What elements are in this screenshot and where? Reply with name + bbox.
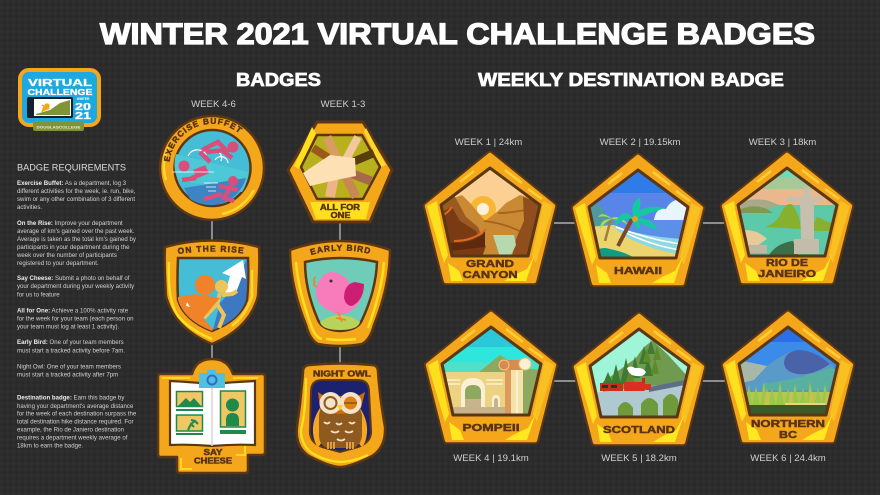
badge: night owl [297,364,385,467]
text block: badge requirements: swim or any other combination of 3 different [17,196,135,203]
text block: badge requirements: for the week for your team (each person on [17,316,134,322]
badge: on the rise [164,239,260,346]
badge: pompeii [428,314,554,440]
title: WINTER 2021 VIRTUAL CHALLENGE BADGES [100,18,815,51]
text block: badge requirements: Early Bird: One of your team members [17,339,124,346]
badge: hawaii: HAWAII [614,265,662,277]
badge: say cheese: SAY [204,448,223,457]
badge: all for one: ONE [330,211,351,220]
text block: badge requirements: week over the number of participants [16,252,117,259]
badge: exercise buffet [158,114,266,222]
label: week 4-6: WEEK 4-6 [191,99,236,110]
heading: badges: BADGES [236,70,321,90]
badge: night owl: NIGHT OWL [313,370,371,378]
badge: all for one [288,122,392,222]
label: week 5: WEEK 5 | 18.2km [601,453,677,464]
badge: rio de janeiro: RIO DE [766,258,808,269]
text block: badge requirements: must start a tracked activity after 7pm [17,372,118,378]
text block: badge requirements: Destination badge: Earn this badge by [17,394,125,402]
badge: say cheese [158,359,265,473]
badge: all for one: ALL FOR [320,203,360,212]
text block: badge requirements: must start a tracked activity before 7am. [17,348,125,354]
badge: rio de janeiro [724,155,850,281]
text block: badge requirements: your team must log at least 1 activity). [17,324,120,330]
badge: say cheese: CHEESE [194,456,232,466]
label: week 1-3: WEEK 1-3 [321,99,365,110]
badge: grand canyon: GRAND [466,258,515,270]
text block: badge requirements: participants in your department during the [17,244,130,251]
text block: badge requirements: different activities for the week, ie. run, bike, [17,188,136,195]
logo: virtual challenge: 20 [75,102,92,113]
badge: exercise buffet: EXERCISE BUFFET [164,118,243,162]
text block: badge requirements: Say Cheese: Submit a photo on behalf of [17,275,130,282]
logo: virtual challenge: 21 [75,111,92,122]
label: week 2: WEEK 2 | 19.15km [600,137,680,148]
logo: virtual challenge: CHALLENGE [28,87,93,97]
badge: early bird [288,240,392,348]
label: week 1: WEEK 1 | 24km [455,137,522,148]
text block: badge requirements: for the week of each destination surpass the [17,410,137,418]
badge: rio de janeiro: JANEIRO [758,269,816,280]
text block: badge requirements: total destination hike distance required. For [17,418,134,426]
text block: badge requirements: activities. [17,204,42,211]
icon: camera [199,370,225,388]
text block: badge requirements: requires a department weekly average of [17,434,128,442]
badge: early bird: EARLY BIRD [310,244,370,256]
badge: grand canyon [427,155,553,281]
badge: grand canyon: CANYON [462,269,518,281]
heading: weekly destination badge: WEEKLY DESTINATION BADGE [478,70,784,90]
logo: virtual challenge: WINTER [77,97,90,101]
logo: virtual challenge: DOUGLASCOLLEGE [36,124,81,129]
text block: badge requirements: On the Rise: Improve your department [17,220,123,227]
badge: northern bc: NORTHERN [751,419,825,430]
label: week 4: WEEK 4 | 19.1km [453,453,529,464]
text block: badge requirements: your department during your weekly activity [17,283,135,290]
badge: northern bc [725,314,851,441]
label: week 3: WEEK 3 | 18km [749,137,816,148]
text block: badge requirements: All for One: Achieve a 100% activity rate [17,308,129,314]
text block: badge requirements: average of km's gained over the past week. [17,228,135,235]
text block: badge requirements: 18km to earn the badge. [17,442,83,450]
logo: virtual challenge [20,70,99,131]
badge: on the rise: ON THE RISE [178,246,244,254]
badge: northern bc: BC [779,430,797,441]
label: week 6: WEEK 6 | 24.4km [750,453,826,464]
text block: badge requirements: for us to feature [17,292,60,298]
text block: badge requirements [16,180,137,450]
badge: pompeii: POMPEII [462,422,520,434]
logo: virtual challenge: VIRTUAL [28,77,93,89]
text block: badge requirements: Night Owl: One of your team members [17,364,121,370]
text block: badge requirements: having your department's average distance [17,403,134,410]
text block: badge requirements: registered to your department. [17,260,99,267]
text block: badge requirements: Exercise Buffet: As a department, log 3 [17,180,127,187]
text block: badge requirements: example, the Rio de Janiero destination [17,426,124,434]
badge: scotland: SCOTLAND [603,424,675,436]
badge: scotland [576,316,702,442]
heading: badge requirements: BADGE REQUIREMENTS [17,162,126,174]
text block: badge requirements: Average is taken as the total km's gained by [17,236,137,243]
badge: hawaii [575,157,701,283]
